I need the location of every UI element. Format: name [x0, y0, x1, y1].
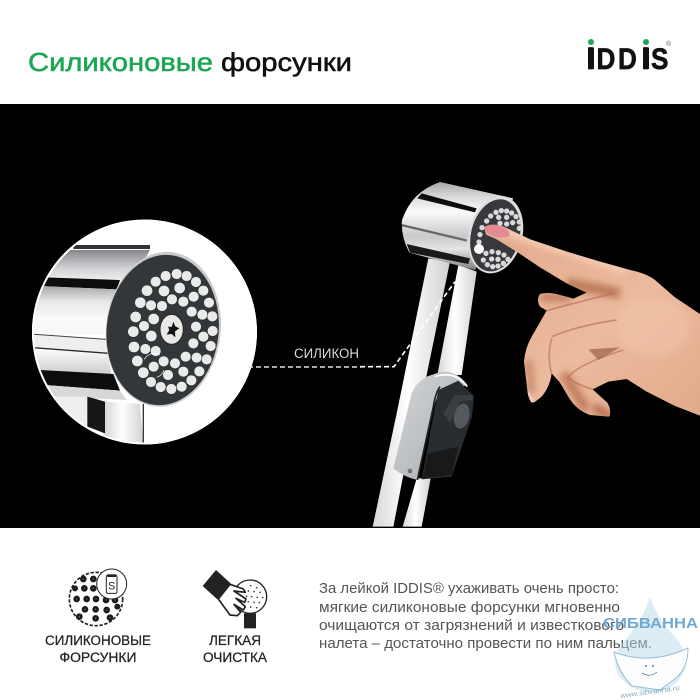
title [28, 47, 352, 77]
label: silicone nozzles: ФОРСУНКИ [60, 650, 136, 665]
description text: налета – достаточно провести по ним пальцем. [319, 636, 652, 652]
label: easy cleaning [203, 633, 267, 665]
icon: silicone nozzles [69, 569, 127, 626]
leader line left part [248, 366, 362, 368]
label: silicone: СИЛИКОН [294, 346, 359, 361]
label: silicone nozzles [45, 633, 151, 665]
logo: IDDIS: iDDiS [587, 42, 668, 75]
hand pressing nozzle [480, 220, 700, 420]
face [460, 190, 531, 279]
description text: мягкие силиконовые форсунки мгновенно [319, 600, 620, 616]
dashed leader line [360, 282, 455, 367]
black trigger [422, 381, 474, 479]
label: easy cleaning: ОЧИСТКА [203, 650, 267, 665]
title: Силиконовые [28, 47, 213, 77]
zoomed circle: silicone nozzle close-up [32, 219, 258, 446]
watermark: Sibvanna [603, 597, 699, 700]
watermark: Sibvanna: www.sibvanna.ru [620, 685, 680, 700]
stem [373, 258, 450, 527]
title: форсунки [221, 47, 352, 77]
description text [319, 581, 652, 652]
logo: IDDIS: ® [666, 40, 672, 48]
product: hygienic shower head [360, 182, 531, 527]
icon: silicone nozzles: S [108, 580, 115, 592]
photo panel: black background [0, 104, 700, 528]
watermark: Sibvanna: СИБВАННА [603, 616, 699, 632]
nozzle face [106, 252, 221, 407]
icon: easy cleaning [203, 570, 267, 628]
label: easy cleaning: ЛЕГКАЯ [209, 633, 261, 648]
silver body [393, 372, 467, 480]
description text: очищаются от загрязнений и известкового [319, 618, 624, 634]
label: silicone nozzles: СИЛИКОНОВЫЕ [45, 633, 151, 648]
head cylinder [402, 182, 513, 270]
description text: За лейкой IDDIS® ухаживать очень просто: [319, 581, 619, 597]
